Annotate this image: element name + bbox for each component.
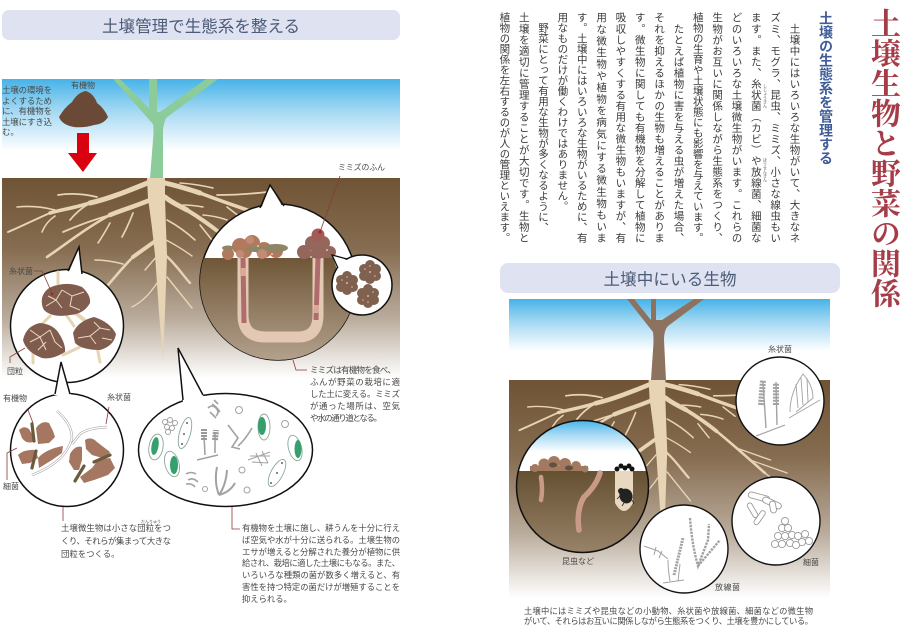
caption: organic matter text [232,507,400,604]
worm note text: ふんが野菜の栽培に適 [310,377,400,387]
text block: main article [498,12,800,243]
organic matter pile [222,235,288,260]
label: actinomycetes: 放線菌 [715,582,740,592]
gray microbes [162,400,288,495]
litter pile [530,456,588,472]
caption: organic matter text: エサが増えると分解された養分が植物に供 [242,547,400,557]
label: filamentous fungus A: 糸状菌 [9,266,33,276]
worm note text: が通った場所は、空気 [310,401,400,411]
earthworm burrow [243,258,318,337]
caption: organic matter text: ば空気や水が十分に送られる。土壌生物の [242,535,400,545]
worm casts pile [297,228,336,259]
soil background [2,178,400,378]
text block: main article: 生物がお互いに関係しながら生態系をつくり、 [711,12,723,243]
callout: bacteria circle [732,477,820,565]
label: bacteria: 細菌 [803,557,819,567]
text block: main article: す。微生物に関しても有機物を分解して植物に [634,12,646,243]
label: insects etc: 昆虫など [562,556,594,566]
label: bacteria: 細菌 [3,481,19,491]
label: organic matter B: 有機物 [3,393,27,403]
text block: main article: 用な微生物や植物を病気にする微生物もいま [595,12,607,243]
text block: main article: 植物の生育や土壌状態にも影響を与えています。 [692,12,704,243]
panel: soil management illustration [2,10,400,604]
callout: microorganisms in aggregate circle [10,362,124,506]
worm note text: した土に変える。ミミズ [310,389,400,399]
text block: main article: 土壌を適切に管理することが大切です。生物と [518,12,530,243]
heading banner: organisms in soil: 土壌中にいる生物 [604,270,736,289]
plant roots [8,178,306,360]
organic matter note: 土壌にすき込 [2,117,53,127]
label: aggregate: 団粒 [7,366,23,376]
arrow: red downward arrow [68,133,97,172]
text block: main article: す。土壌中にはいろいろな生物がいるために、有 [576,12,588,243]
label: organic matter: 有機物 [71,80,95,90]
caption: aggregate text: 土壌微生物は小さな団粒をつ [61,523,171,533]
caption: organic matter text: 害性を持つ特定の菌だけが増殖することを [242,582,400,592]
text block: main article: どのいろいろな土壌微生物がいます。これらの [730,12,742,243]
text block: main article: 野菜にとって有用な生物が多くなるように、 [537,22,549,232]
plant stem [113,79,218,178]
caption: organic matter text: いろいろな種類の菌が数多く増えると、有 [242,570,400,580]
subheading: manage the soil ecosystem: 土壌の生態系を管理する [818,11,834,165]
label: worm casts with leader [318,162,385,234]
caption: organic matter text: 有機物を土壌に施し、耕うんを十分に行え [242,523,400,533]
worms [541,477,542,500]
heading banner: soil management: 土壌管理で生態系を整える [102,17,300,36]
callout: insects circle [516,420,650,555]
text block: main article: ズミ、モグラ、昆虫、ミミズ、小さな線虫もい [769,12,781,243]
label: filamentous fungus B: 糸状菌 [107,392,131,402]
caption: soil organisms: 土壌中にはミミズや昆虫などの小動物、糸状菌や放線菌、細菌などの微生物 [524,606,813,616]
callout: soil microorganism ellipse [138,348,312,506]
soil background [509,380,830,598]
label: worm casts with leader: ミミズのふん [338,162,385,172]
callout: soil aggregates circle [10,247,124,382]
caption: organic matter text: 給され、栽培に適した土壌にもなる。また、 [242,558,400,568]
heading banner: organisms in soil [500,263,840,293]
organic matter note [2,85,53,137]
heading banner: soil management [2,10,400,40]
callout: earthworm circle [195,185,365,363]
text block: main article: たとえば植物に害を与える虫が増えた場合、 [672,23,684,243]
text block: main article: ます。また、糸状菌（カビ）や放線菌、細菌な [750,12,762,243]
tree trunk [627,299,704,380]
label: filamentous fungus A [9,266,53,295]
label: filamentous fungus B [106,392,131,424]
caption: aggregate text: くり、それらが集まって大きな [61,536,171,546]
sky background [509,299,830,351]
caption: soil organisms: がいて、それらはお互いに関係しながら生態系をつくり、土壌を豊かにしている。 [524,616,813,626]
label: aggregate [7,348,25,376]
caption: organic matter text: 抑えられる。 [242,594,292,604]
organic matter note: に、有機物を [2,106,52,116]
caption: aggregate text: だんりゅう [141,518,161,524]
label: bacteria [3,448,19,491]
caption: soil organisms [524,606,813,626]
callout: worm cast detail circle [332,255,392,315]
panel: organisms in the soil illustration [500,263,840,626]
organic matter note: む。 [2,127,19,137]
tree roots [519,380,796,549]
ruby: actinomycetes reading: ほうせんきん [763,158,768,182]
ruby: filamentous fungus reading: しじょうきん [763,84,768,108]
callout: actinomycetes circle [640,505,728,593]
label: filamentous fungus: 糸状菌 [768,344,792,354]
caption: aggregate text: 団粒をつくる。 [61,549,119,559]
text block: main article: 土壌中にはいろいろな生物がいて、大きなネ [788,23,800,243]
organic matter note: よくするため [2,96,52,106]
sky background [2,79,400,151]
text block: main article: 植物の関係を左右するのが人の管理といえます。 [498,12,510,243]
icon: organic matter mound [59,91,108,127]
callout: filamentous fungus circle [736,357,824,445]
worm note text: ミミズは有機物を食べ、 [310,365,396,375]
organic matter note: 土壌の環境を [2,85,52,95]
caption: aggregate text [61,507,171,559]
worm note text [293,360,400,423]
label: organic matter B [3,393,33,423]
worm note text: や水の通り道となる。 [310,413,382,423]
text block: main article: 吸収しやすくする有用な微生物もいますが、有 [614,12,626,243]
green cells [147,414,305,489]
text block: main article: それを抑えるほかの生物も増えることがありま [653,12,665,243]
text block: main article: 用なものだけが働くわけではありません。 [556,12,568,212]
title: soil organisms and vegetables: 土壌生物と野菜の関係 [866,8,899,308]
burrow with beetle [615,471,633,511]
